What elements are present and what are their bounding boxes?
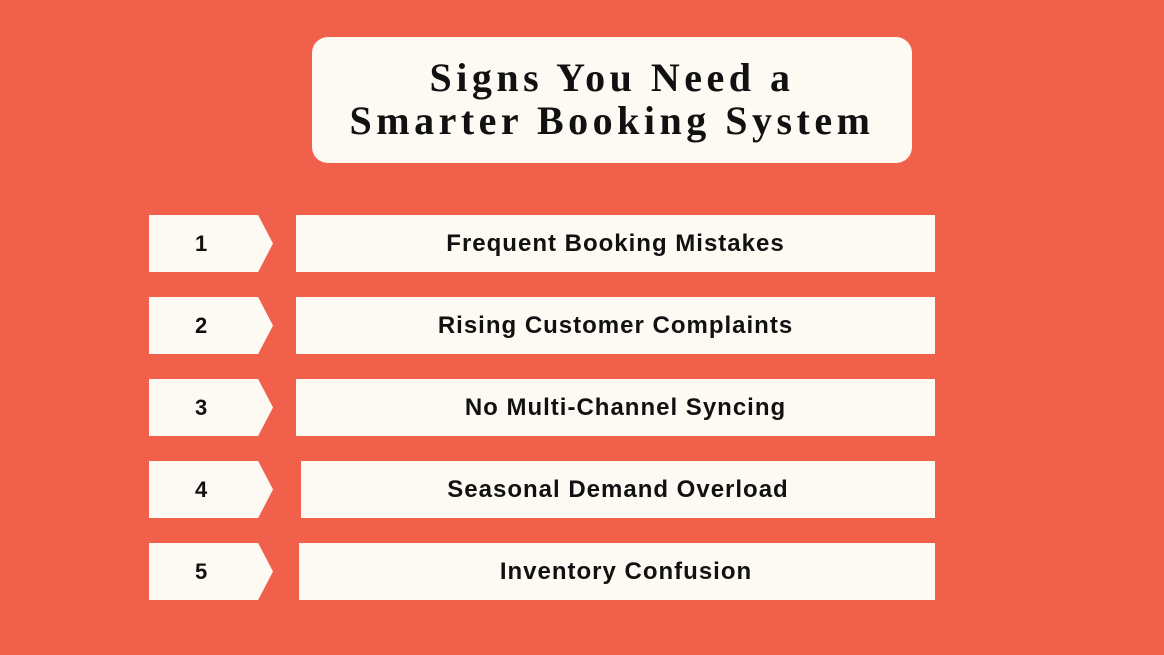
tab: 4 (149, 461, 273, 518)
item: 1: Frequent Booking Mistakes (446, 230, 785, 257)
item: 2 (296, 297, 935, 354)
tab: 3: 3 (195, 395, 207, 420)
item: 4: Seasonal Demand Overload (447, 476, 789, 503)
tab: 4: 4 (195, 477, 207, 502)
title: Signs You Need a (429, 55, 795, 100)
title: Smarter Booking System (350, 98, 874, 143)
item: 5: Inventory Confusion (500, 558, 752, 585)
tab: 2 (149, 297, 273, 354)
item: 4 (301, 461, 935, 518)
tab: 1: 1 (195, 231, 207, 256)
tab: 5: 5 (195, 559, 207, 584)
item: 3 (296, 379, 935, 436)
item: 1 (296, 215, 935, 272)
item: 2: Rising Customer Complaints (438, 312, 793, 339)
tab: 1 (149, 215, 273, 272)
tab: 2: 2 (195, 313, 207, 338)
item: 3: No Multi-Channel Syncing (465, 394, 786, 421)
tab: 3 (149, 379, 273, 436)
item: 5 (299, 543, 935, 600)
tab: 5 (149, 543, 273, 600)
title (312, 37, 912, 163)
